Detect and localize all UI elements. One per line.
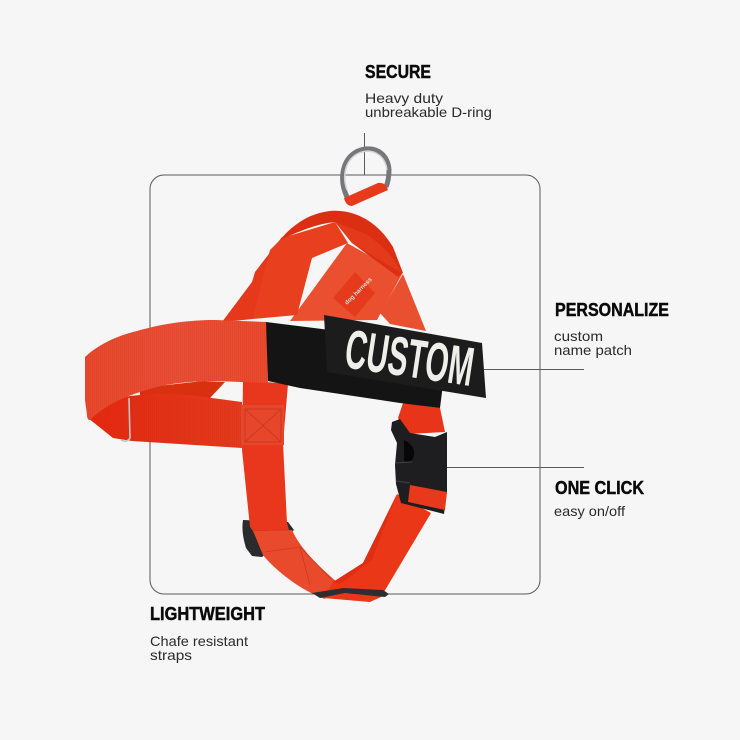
centre chest strap — [290, 243, 402, 321]
D-ring — [343, 149, 389, 206]
left shoulder outer strap — [222, 237, 300, 322]
description: lightweight: Chafe resistant — [150, 633, 248, 649]
stitched box — [241, 405, 284, 445]
description: one click: easy on/off — [554, 503, 625, 519]
side slider — [242, 520, 294, 557]
callout: personalize — [554, 300, 669, 358]
name patch — [324, 315, 486, 398]
right shoulder strap — [380, 274, 426, 331]
heading: one click: ONE CLICK — [555, 478, 644, 498]
heading: secure: SECURE — [365, 62, 431, 82]
main body band — [85, 320, 268, 420]
heading: lightweight: LIGHTWEIGHT — [150, 604, 265, 624]
description: personalize: custom — [554, 328, 603, 344]
front vertical strap — [242, 380, 289, 531]
inner back band — [88, 394, 242, 448]
heading: personalize: PERSONALIZE — [555, 300, 669, 320]
yoke right fold highlight — [335, 222, 401, 273]
bottom slider — [312, 588, 389, 598]
side buckle ring — [121, 398, 130, 441]
description: personalize: name patch — [554, 342, 632, 358]
description: secure: unbreakable D-ring — [365, 104, 492, 120]
callout: lightweight — [150, 604, 265, 663]
velcro panel — [266, 322, 445, 408]
shadow wedge under band — [140, 381, 225, 398]
leader line: personalize — [484, 368, 584, 370]
lower right strap — [323, 494, 431, 602]
lower left strap — [253, 530, 337, 599]
callout: one click — [554, 478, 644, 519]
leader line: one click — [445, 466, 584, 468]
frame around harness — [150, 175, 540, 594]
callout: secure — [365, 62, 492, 120]
left shoulder panel — [253, 222, 348, 319]
brand label — [333, 272, 375, 317]
patch lettering: CUSTOM — [341, 318, 478, 398]
plastic buckle — [391, 419, 447, 514]
leader line: secure — [364, 133, 366, 175]
brand label: dog harness — [344, 276, 374, 306]
top yoke dark fold — [280, 211, 403, 277]
upper buckle strap — [398, 403, 445, 434]
description: lightweight: straps — [150, 647, 192, 663]
illustration: red dog harness — [85, 149, 486, 602]
description: secure: Heavy duty — [365, 90, 443, 106]
